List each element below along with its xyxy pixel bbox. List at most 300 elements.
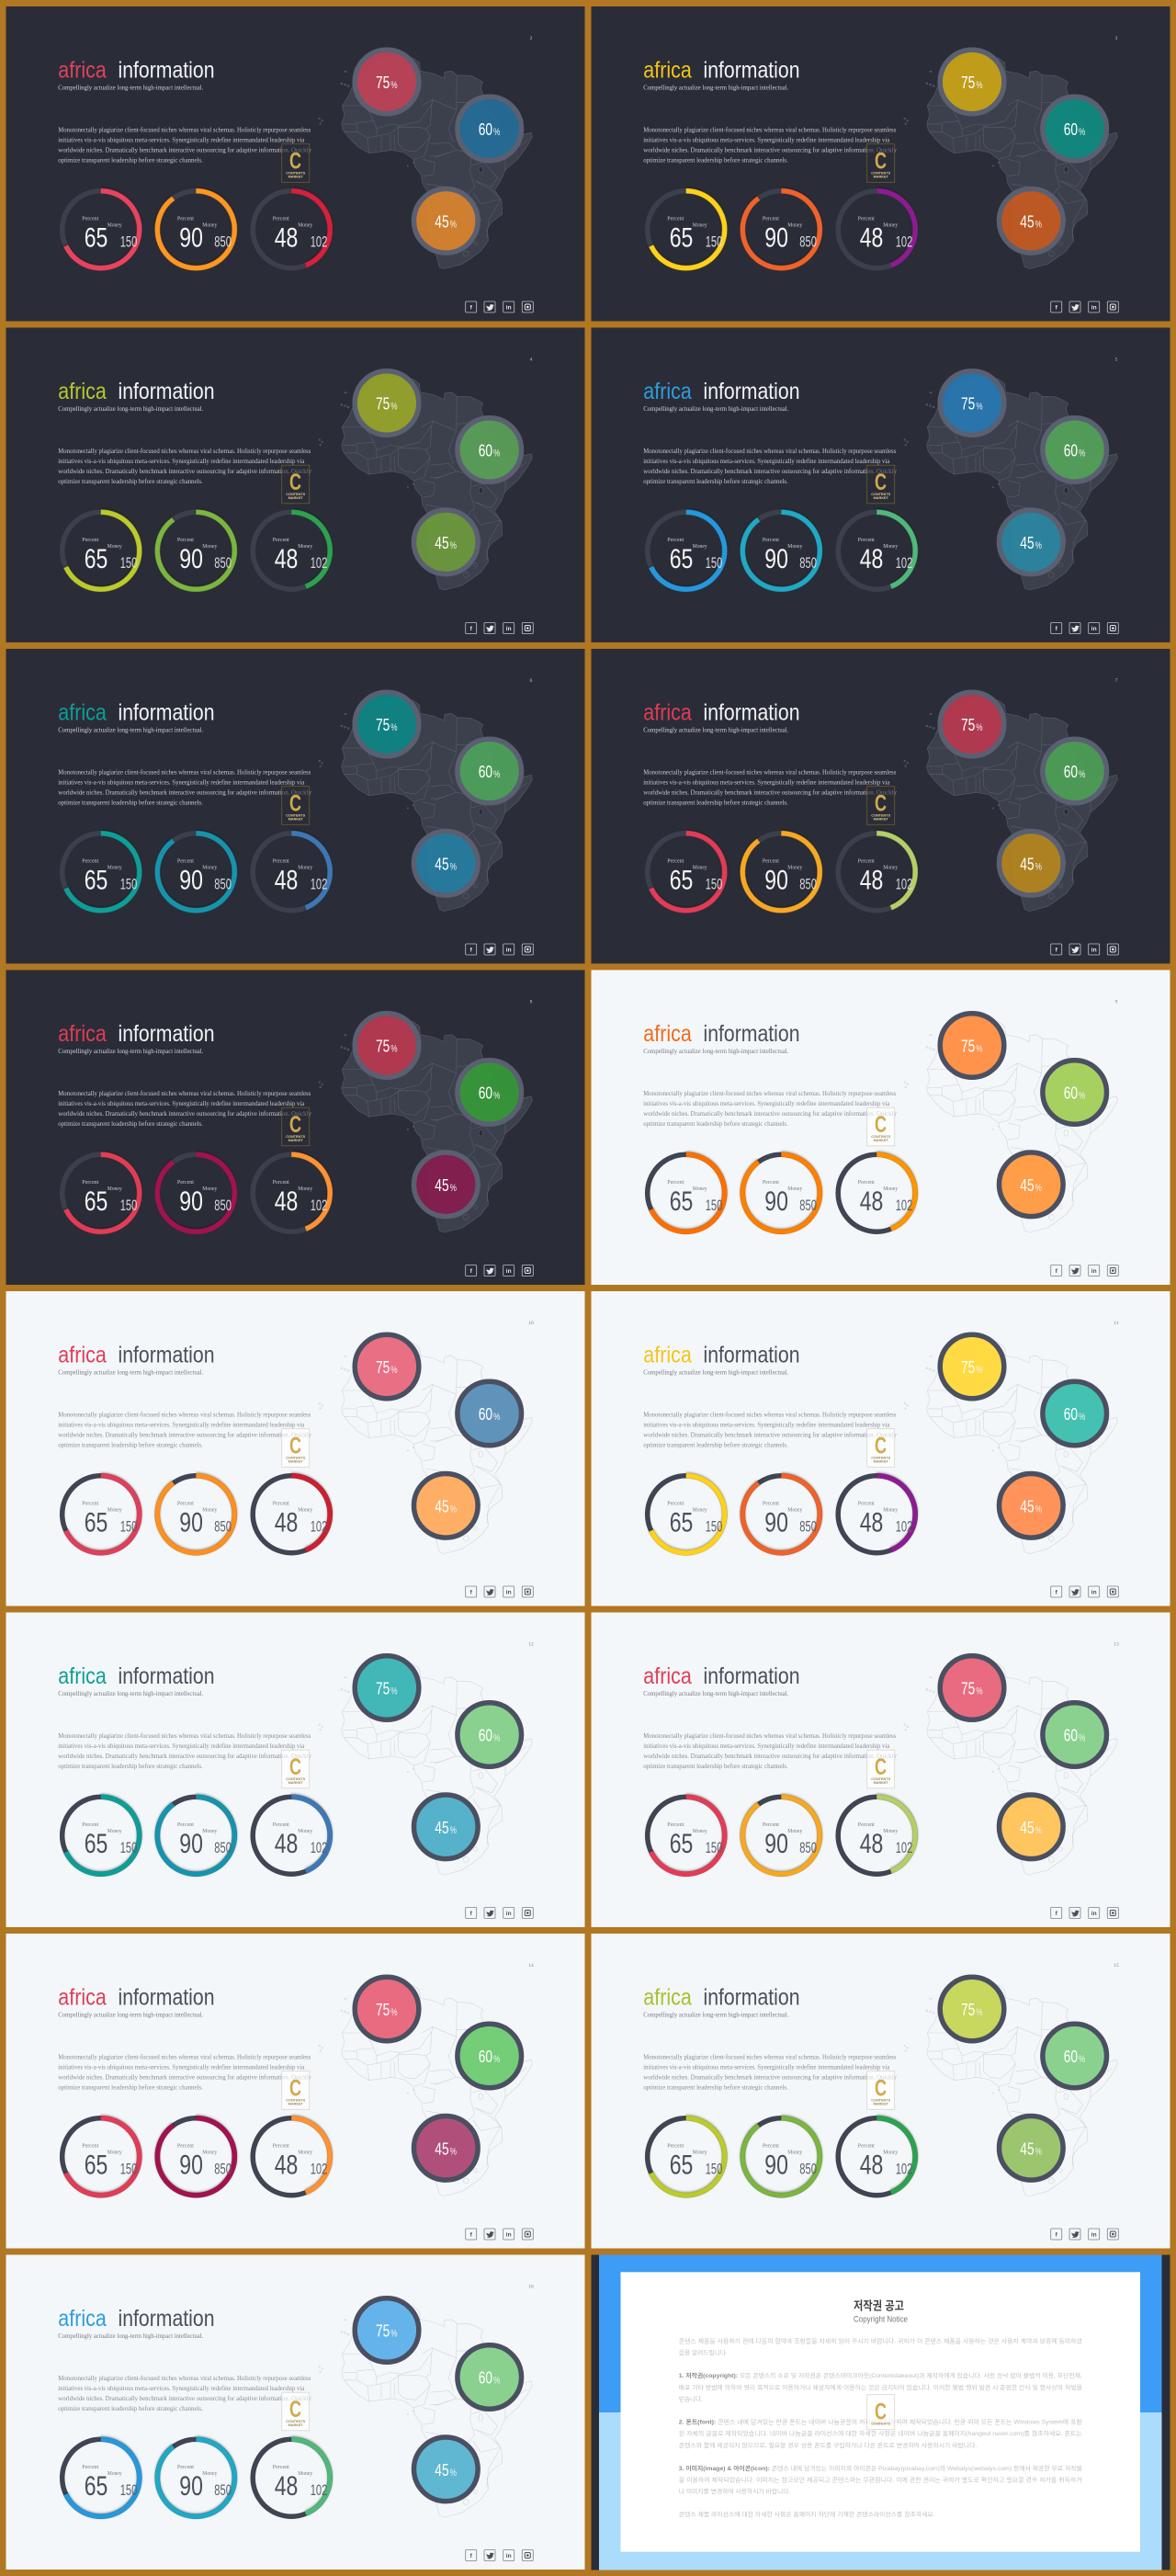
- circle 45%: 45: [435, 855, 449, 873]
- ring 65: Money: [693, 222, 707, 229]
- ring 65: [62, 1476, 140, 1553]
- social icons: [1051, 623, 1118, 634]
- map of africa: [904, 1340, 1117, 1554]
- ring 65: 150: [706, 233, 722, 250]
- body text: initiatives vis-a-vis ubiquitous meta-services. Synergistically redefine intermandated leadership via: [643, 458, 890, 465]
- body text: Monotonectally plagiarize client-focused niches whereas viral schemas. Holisticly repurpose seamless: [643, 1732, 896, 1740]
- circle 75%: 75: [376, 716, 390, 734]
- circle 45%: [413, 1474, 478, 1538]
- body text: Monotonectally plagiarize client-focused niches whereas viral schemas. Holisticly repurpose seamless: [58, 127, 311, 134]
- map of africa: [319, 1018, 532, 1232]
- logo badge: C: [289, 149, 301, 175]
- ring 48: 102: [311, 1518, 327, 1535]
- page number: 7: [1115, 678, 1118, 684]
- ring 65: Money: [107, 543, 122, 550]
- ring 48: [838, 1154, 915, 1231]
- logo badge: [282, 144, 310, 182]
- ring 48: 48: [275, 1507, 298, 1538]
- body text: Monotonectally plagiarize client-focused niches whereas viral schemas. Holisticly repurpose seamless: [58, 1412, 311, 1419]
- body text: Monotonectally plagiarize client-focused niches whereas viral schemas. Holisticly repurpose seamless: [58, 768, 311, 776]
- ring 90: Percent: [763, 2143, 779, 2150]
- logo badge: [867, 465, 895, 504]
- ring 65: 65: [85, 544, 107, 574]
- ring 90: [742, 834, 820, 911]
- logo badge: [282, 1429, 310, 1467]
- notice text: 을 이용하여 제작되었습니다. 이미지는 참고로만 제공되고 콘텐스와는 무관합니다. 이에 관한 권리는 귀하가 별도로 확인하고 필요할 경우 허가를 취득하거: [679, 2476, 1082, 2483]
- social icons: [466, 2229, 533, 2240]
- title: information: [118, 2306, 215, 2332]
- map of africa: [904, 1982, 1117, 2196]
- ring 65: Money: [107, 865, 122, 871]
- logo badge: [282, 1107, 310, 1146]
- ring 90: Percent: [763, 537, 779, 543]
- social icons: in: [1091, 1590, 1097, 1595]
- ring 65: 150: [120, 233, 137, 250]
- title: [643, 699, 799, 725]
- subtitle: Compellingly actualize long-term high-impact intellectual.: [58, 2332, 203, 2340]
- ring 65: Money: [107, 1186, 122, 1192]
- logo badge: MARKET: [288, 1459, 303, 1463]
- ring 90: 90: [179, 1186, 203, 1217]
- page number: 12: [528, 1641, 534, 1647]
- notice text: 된 자체의 글꼴로 제작되었습니다. 네이버 나눔글꼴 라이선스에 대한 자세한 사항은 네이버 나눔글꼴 홈페이지(hangeul.naver.com)를 참조하세요. 폰트는: [679, 2429, 1082, 2437]
- circle 60%: [1043, 2024, 1106, 2088]
- ring 90: Money: [787, 543, 803, 550]
- logo badge: C: [289, 2075, 301, 2101]
- ring 65: 150: [120, 1197, 137, 1214]
- body text: initiatives vis-a-vis ubiquitous meta-services. Synergistically redefine intermandated leadership via: [643, 1742, 890, 1750]
- circle 60%: %: [493, 2054, 500, 2065]
- ring 48: Money: [298, 543, 313, 550]
- ring 65: [648, 191, 725, 268]
- ring 90: Percent: [177, 1501, 194, 1507]
- ring 90: Percent: [177, 2143, 194, 2150]
- logo badge: MARKET: [874, 1139, 888, 1142]
- circle 45%: [413, 2437, 478, 2502]
- page number: 3: [1115, 36, 1118, 41]
- title: [643, 1663, 799, 1689]
- ring 48: [253, 512, 330, 589]
- ring 90: 90: [179, 1507, 203, 1538]
- ring 90: [157, 191, 234, 268]
- logo badge: [867, 2071, 895, 2109]
- ring 90: 850: [214, 555, 232, 572]
- logo badge: CONTENTS: [286, 2099, 306, 2103]
- circle 45%: [1000, 189, 1063, 253]
- panel: copyright notice: [592, 2255, 1170, 2570]
- circle 75%: [355, 1014, 419, 1077]
- title: information: [704, 699, 799, 725]
- ring 65: Percent: [82, 1821, 99, 1828]
- circle 75%: [355, 692, 419, 756]
- social icons: [1051, 1265, 1118, 1276]
- ring 90: 90: [179, 222, 203, 253]
- body text: [643, 1412, 897, 1449]
- ring 90: [157, 2118, 234, 2196]
- ring 90: 850: [799, 2161, 817, 2177]
- circle 60%: 60: [1064, 441, 1078, 460]
- ring 90: Money: [202, 543, 218, 550]
- body text: Monotonectally plagiarize client-focused niches whereas viral schemas. Holisticly repurpose seamless: [58, 1090, 311, 1097]
- social icons: in: [1091, 1268, 1097, 1275]
- ring 90: Money: [202, 2470, 218, 2477]
- title: africa: [643, 1342, 692, 1367]
- ring 90: 90: [764, 1186, 788, 1217]
- title: [643, 57, 799, 83]
- title: information: [118, 57, 215, 83]
- ring 65: 150: [706, 1197, 722, 1214]
- title: information: [118, 1663, 215, 1689]
- ring 65: [648, 1476, 725, 1553]
- circle 45%: 45: [435, 1819, 449, 1837]
- notice text: 3. 이미지(image) & 아이콘(icon): 콘텐스 내에 담겨있는 이미지와 아이콘은 Pixabay(pixabay.com)와 Webalys(webalys.com) 등에서 제공한 무료 저작물: [679, 2464, 1082, 2472]
- logo badge: CONTENTS: [286, 1135, 306, 1139]
- ring 90: [157, 1154, 234, 1231]
- ring 90: [157, 834, 234, 911]
- body text: initiatives vis-a-vis ubiquitous meta-services. Synergistically redefine intermandated leadership via: [58, 1421, 305, 1428]
- logo badge: MARKET: [288, 1781, 303, 1785]
- ring 90: Money: [787, 1828, 803, 1834]
- subtitle: Compellingly actualize long-term high-impact intellectual.: [58, 1048, 203, 1055]
- ring 48: Money: [298, 222, 313, 229]
- notice text: 콘텐스 제품 라이선스에 대한 자세한 사항은 홈페이지 하단에 기재한 콘텐스라이선스를 참조하세요.: [679, 2510, 935, 2518]
- body text: [643, 1732, 897, 1770]
- ring 65: 65: [85, 865, 107, 895]
- panel: slide 11 light yellow: [592, 1291, 1170, 1606]
- ring 48: 102: [311, 1197, 327, 1214]
- circle 75%: 75: [376, 2321, 390, 2340]
- logo badge: [867, 144, 895, 182]
- map of africa: [904, 376, 1117, 590]
- ring 65: [62, 512, 140, 589]
- ring 48: 102: [896, 233, 912, 250]
- panel: slide 13 light red green gold: [592, 1612, 1170, 1927]
- body text: [643, 1090, 897, 1128]
- circle 60%: %: [1079, 2054, 1085, 2065]
- page number: 10: [528, 1321, 534, 1326]
- circle 60%: %: [493, 448, 500, 460]
- circle 75%: [940, 1334, 1004, 1399]
- body text: optimize transparent leadership before strategic channels.: [58, 2405, 203, 2412]
- body text: worldwide niches. Dramatically benchmark interactive outsourcing for adaptive information. Quickly: [643, 1110, 897, 1118]
- title: africa: [643, 57, 692, 83]
- ring 48: 102: [896, 876, 912, 892]
- ring 48: Money: [298, 1507, 313, 1514]
- social icons: f: [1056, 947, 1058, 954]
- circle 60%: %: [1079, 769, 1085, 780]
- ring 48: [253, 1476, 330, 1553]
- circle 60%: %: [1079, 1412, 1085, 1423]
- circle 60%: 60: [1064, 1405, 1078, 1424]
- title: [58, 379, 214, 404]
- title: africa: [643, 1663, 692, 1689]
- ring 90: 850: [214, 233, 232, 250]
- page number: 2: [530, 36, 533, 41]
- ring 48: 102: [311, 2482, 327, 2499]
- ring 90: Money: [202, 222, 218, 229]
- social icons: [466, 1908, 533, 1919]
- body text: optimize transparent leadership before strategic channels.: [643, 2084, 788, 2092]
- title: [58, 57, 214, 83]
- body text: initiatives vis-a-vis ubiquitous meta-services. Synergistically redefine intermandated leadership via: [58, 2064, 305, 2071]
- ring 90: Money: [202, 1186, 218, 1192]
- circle 75%: 75: [961, 1037, 975, 1055]
- map of africa: [904, 1661, 1117, 1875]
- ring 90: [742, 1154, 820, 1231]
- ring 48: Percent: [858, 216, 875, 222]
- page number: 6: [530, 678, 533, 684]
- logo badge: [867, 1750, 895, 1788]
- ring 48: Percent: [273, 537, 289, 543]
- body text: [58, 1732, 311, 1770]
- map of africa: [319, 1340, 532, 1554]
- circle 75%: [940, 1977, 1004, 2041]
- ring 90: Money: [202, 1507, 218, 1514]
- ring 90: [157, 512, 234, 589]
- ring 48: 48: [860, 544, 883, 574]
- social icons: f: [1056, 305, 1058, 311]
- subtitle: Compellingly actualize long-term high-impact intellectual.: [58, 1368, 203, 1376]
- ring 65: 65: [670, 1829, 693, 1859]
- circle 60%: 60: [1064, 2048, 1078, 2066]
- circle 45%: %: [450, 1504, 457, 1515]
- circle 45%: %: [450, 861, 457, 872]
- social icons: in: [506, 1268, 512, 1275]
- logo badge: C: [289, 1434, 301, 1459]
- title: africa: [643, 1984, 692, 2010]
- social icons: [466, 623, 533, 634]
- circle 75%: 75: [961, 1680, 975, 1698]
- logo badge: C: [289, 470, 301, 495]
- ring 48: 48: [860, 865, 883, 895]
- body text: worldwide niches. Dramatically benchmark interactive outsourcing for adaptive information. Quickly: [643, 789, 897, 797]
- logo badge: [867, 2395, 895, 2430]
- body text: [643, 768, 897, 807]
- page number: 15: [1114, 1963, 1119, 1969]
- ring 65: 150: [706, 2161, 722, 2177]
- social icons: in: [506, 626, 512, 632]
- circle 60%: %: [493, 1090, 500, 1101]
- ring 90: Percent: [177, 216, 194, 222]
- circle 60%: 60: [479, 1726, 492, 1744]
- body text: worldwide niches. Dramatically benchmark interactive outsourcing for adaptive information. Quickly: [58, 2395, 311, 2402]
- body text: initiatives vis-a-vis ubiquitous meta-services. Synergistically redefine intermandated leadership via: [58, 1100, 305, 1107]
- ring 65: 150: [120, 555, 137, 572]
- circle 60%: 60: [479, 441, 492, 460]
- social icons: in: [506, 1590, 512, 1595]
- ring 65: Percent: [667, 537, 684, 543]
- logo badge: C: [875, 2075, 887, 2101]
- social icons: f: [470, 1268, 473, 1275]
- title: [58, 2306, 214, 2332]
- title: africa: [58, 1984, 107, 2010]
- body text: optimize transparent leadership before strategic channels.: [58, 1763, 203, 1770]
- ring 90: 90: [179, 544, 203, 574]
- social icons: f: [1056, 1911, 1058, 1917]
- social icons: [1051, 944, 1118, 955]
- logo badge: MARKET: [874, 818, 888, 822]
- circle 45%: %: [1035, 1825, 1042, 1836]
- body text: worldwide niches. Dramatically benchmark interactive outsourcing for adaptive information. Quickly: [58, 1110, 311, 1118]
- body text: [58, 127, 311, 165]
- ring 48: Percent: [273, 1821, 289, 1828]
- ring 65: Percent: [82, 2143, 99, 2150]
- ring 48: Percent: [273, 858, 289, 865]
- ring 48: 48: [275, 544, 298, 574]
- ring 90: [742, 1476, 820, 1553]
- circle 75%: [940, 50, 1004, 114]
- map of africa: [319, 1982, 532, 2196]
- logo badge: [867, 787, 895, 824]
- logo badge: CONTENTS: [871, 171, 891, 175]
- circle 75%: %: [976, 80, 983, 91]
- title: africa: [58, 57, 107, 83]
- body text: optimize transparent leadership before strategic channels.: [58, 478, 203, 485]
- ring 48: 102: [896, 1518, 912, 1535]
- logo badge: C: [289, 2397, 301, 2423]
- ring 48: Money: [883, 1507, 899, 1514]
- ring 90: Percent: [177, 1179, 194, 1186]
- circle 75%: %: [390, 1365, 398, 1376]
- logo badge: CONTENTS: [871, 814, 891, 818]
- circle 60%: [458, 1703, 522, 1766]
- ring 48: 48: [860, 1186, 883, 1217]
- ring 90: Percent: [177, 537, 194, 543]
- circle 45%: %: [1035, 2146, 1042, 2157]
- circle 45%: 45: [1020, 1497, 1035, 1515]
- panel: slide 4 dark lime: [6, 327, 584, 642]
- circle 60%: %: [1079, 1090, 1085, 1101]
- map of africa: [319, 698, 532, 912]
- circle 75%: %: [390, 1685, 398, 1697]
- ring 65: 65: [670, 544, 693, 574]
- logo badge: C: [289, 1112, 301, 1138]
- circle 75%: 75: [376, 1037, 390, 1055]
- circle 75%: [940, 1014, 1004, 1077]
- logo badge: [282, 1750, 310, 1788]
- circle 45%: [1000, 1152, 1063, 1217]
- notice text: 배포 기타 방법에 의하여 영리 목적으로 이용하거나 제삼자에게 이용하는 것은 금지되어 있습니다. 이러한 불법 행위 발견 시 준엄한 민사 및 형사상의 처벌을: [679, 2383, 1082, 2391]
- social icons: [1051, 2229, 1118, 2240]
- body text: Monotonectally plagiarize client-focused niches whereas viral schemas. Holisticly repurpose seamless: [643, 2053, 896, 2060]
- social icons: [1051, 301, 1118, 312]
- circle 60%: [1043, 1381, 1106, 1446]
- subtitle: Compellingly actualize long-term high-impact intellectual.: [643, 1690, 788, 1697]
- ring 65: 65: [670, 865, 693, 895]
- ring 65: 65: [85, 2471, 107, 2502]
- ring 65: Money: [693, 1828, 707, 1834]
- logo badge: C: [875, 2399, 887, 2424]
- ring 65: [648, 1797, 725, 1874]
- social icons: in: [506, 947, 512, 954]
- ring 48: [838, 834, 915, 911]
- logo badge: C: [289, 790, 301, 816]
- ring 90: Money: [787, 1186, 803, 1192]
- logo badge: MARKET: [288, 1139, 303, 1142]
- ring 48: [253, 1797, 330, 1874]
- circle 45%: %: [1035, 219, 1042, 230]
- circle 75%: %: [390, 722, 398, 733]
- logo badge: C: [875, 149, 887, 175]
- ring 65: [62, 1154, 140, 1231]
- circle 75%: %: [976, 722, 983, 733]
- notice text: [679, 2336, 1082, 2518]
- body text: optimize transparent leadership before strategic channels.: [643, 478, 788, 485]
- ring 48: Money: [883, 2150, 899, 2156]
- title: information: [118, 1021, 215, 1047]
- subtitle: Compellingly actualize long-term high-impact intellectual.: [643, 84, 788, 91]
- circle 75%: [940, 1656, 1004, 1719]
- circle 75%: %: [976, 1044, 983, 1055]
- circle 45%: 45: [435, 2461, 449, 2480]
- ring 65: Money: [107, 2150, 122, 2156]
- ring 65: Percent: [82, 216, 99, 222]
- ring 65: Percent: [667, 1821, 684, 1828]
- ring 48: Percent: [273, 2464, 289, 2470]
- circle 45%: [413, 831, 478, 895]
- circle 75%: %: [390, 401, 398, 412]
- circle 75%: [355, 1656, 419, 1719]
- body text: Monotonectally plagiarize client-focused niches whereas viral schemas. Holisticly repurpose seamless: [643, 1090, 896, 1097]
- map of africa: [319, 55, 532, 269]
- title: [58, 699, 214, 725]
- ring 90: 90: [764, 544, 788, 574]
- circle 60%: 60: [479, 2369, 492, 2388]
- logo badge: CONTENTS: [286, 1456, 306, 1459]
- circle 75%: [940, 371, 1004, 435]
- ring 90: Percent: [763, 1501, 779, 1507]
- ring 65: Money: [693, 543, 707, 550]
- ring 65: Percent: [82, 1501, 99, 1507]
- map of africa: [319, 2303, 532, 2517]
- circle 60%: %: [1079, 448, 1085, 460]
- logo badge: CONTENTS: [871, 493, 891, 496]
- title: information: [704, 1342, 799, 1367]
- social icons: f: [1056, 626, 1058, 632]
- circle 60%: [458, 1381, 522, 1446]
- ring 48: 48: [860, 2150, 883, 2180]
- body text: worldwide niches. Dramatically benchmark interactive outsourcing for adaptive information. Quickly: [58, 468, 311, 475]
- circle 45%: [1000, 831, 1063, 895]
- map of africa: [904, 55, 1117, 269]
- ring 90: [742, 512, 820, 589]
- title: africa: [58, 1021, 107, 1047]
- ring 90: Percent: [177, 1821, 194, 1828]
- logo badge: CONTENTS: [286, 814, 306, 818]
- ring 65: 150: [706, 555, 722, 572]
- circle 60%: 60: [1064, 120, 1078, 139]
- social icons: in: [1091, 305, 1097, 311]
- circle 75%: %: [976, 401, 983, 412]
- social icons: [466, 2549, 533, 2560]
- social icons: in: [1091, 626, 1097, 632]
- ring 48: [253, 191, 330, 268]
- ring 90: 850: [799, 876, 817, 892]
- circle 60%: 60: [479, 1084, 492, 1103]
- ring 65: 65: [85, 1186, 107, 1217]
- logo badge: CONTENTS: [871, 1456, 891, 1459]
- notice text: 음을 알려드립니다.: [679, 2348, 728, 2356]
- ring 48: 102: [896, 555, 912, 572]
- logo badge: MARKET: [288, 2103, 303, 2106]
- logo badge: [282, 465, 310, 504]
- ring 65: [62, 834, 140, 911]
- panel: slide 2 dark red: [6, 6, 584, 322]
- circle 60%: %: [1079, 127, 1085, 138]
- title: information: [118, 379, 215, 404]
- circle 60%: %: [493, 769, 500, 780]
- circle 75%: %: [976, 1365, 983, 1376]
